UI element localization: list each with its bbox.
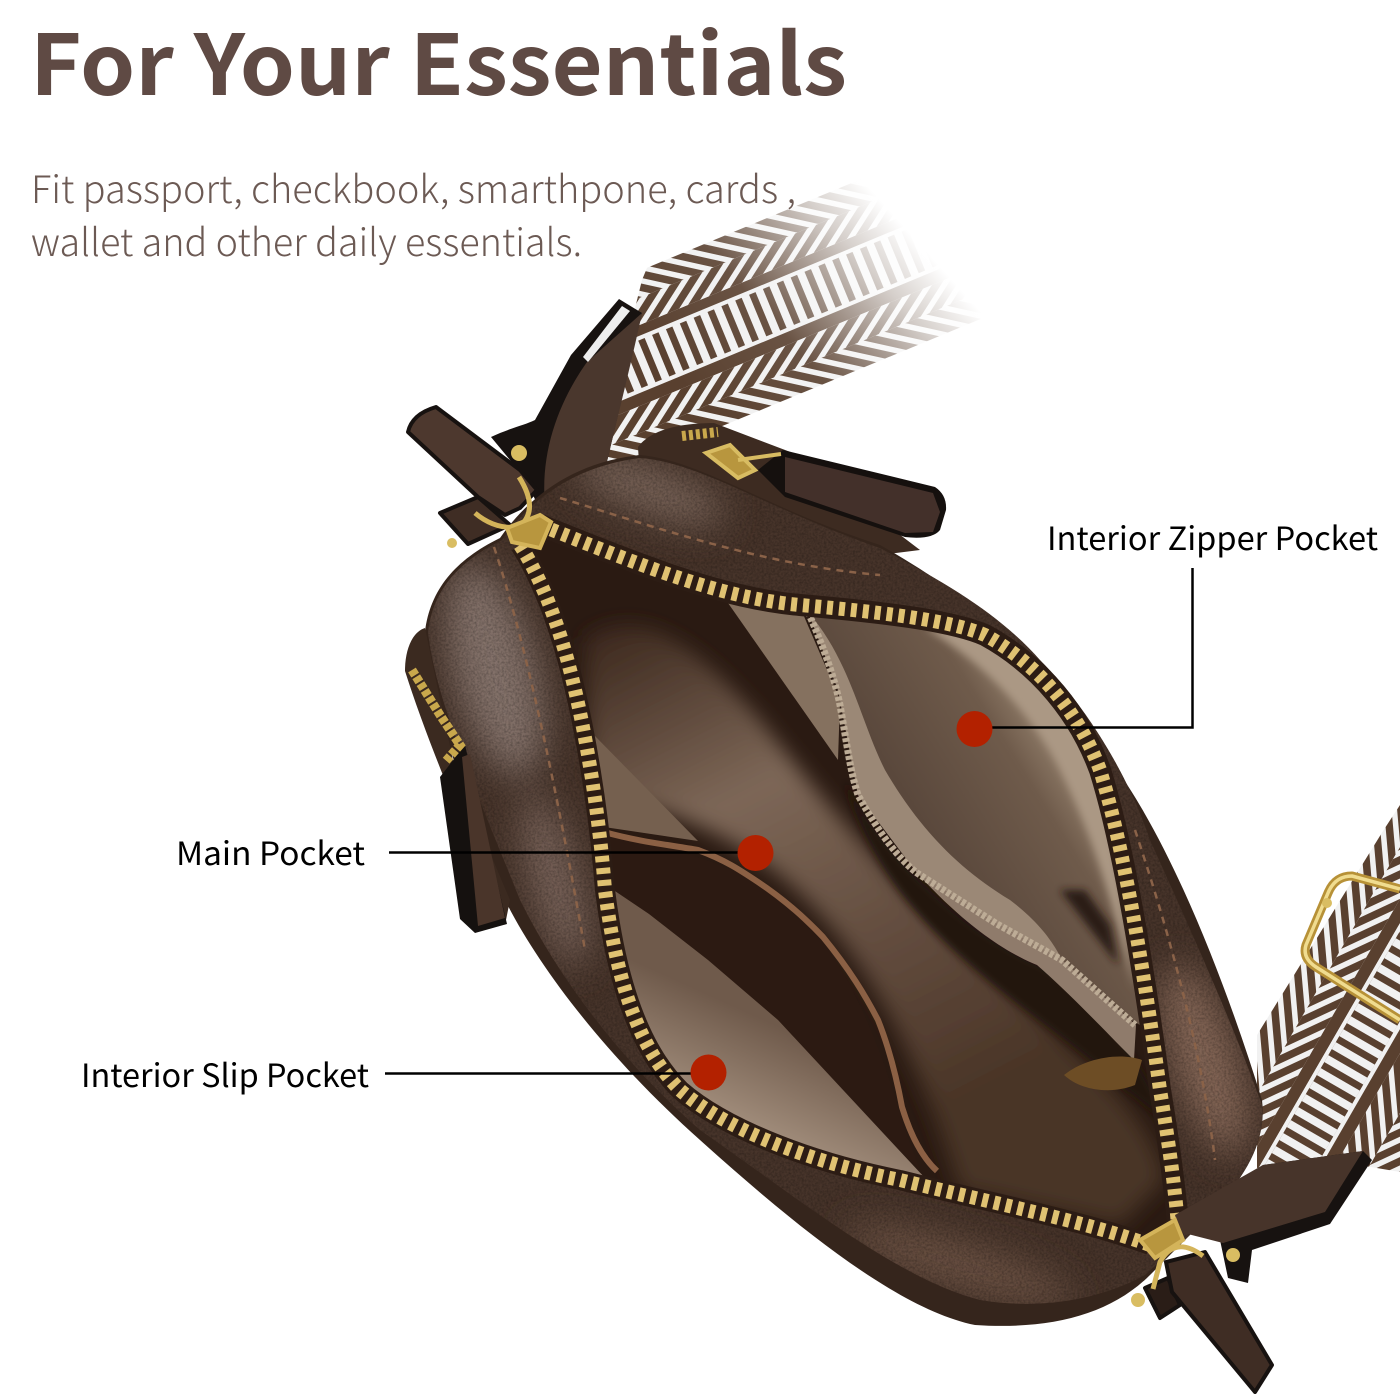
callout: main pocket [176, 829, 774, 875]
slip pocket fabric [605, 887, 925, 1180]
zipper pocket lower lip [917, 873, 1136, 1060]
callout: main pocket: Main Pocket [176, 829, 365, 875]
strap tab: left leather loop [408, 407, 537, 548]
zipper slider: top corner [475, 477, 551, 548]
subtitle: wallet and other daily essentials. [31, 212, 582, 267]
icon: gold strap buckle [1305, 876, 1400, 1020]
bag: back outer leather edge [425, 455, 1263, 1326]
zipper: main opening, lower edge [520, 545, 1150, 1245]
zipper puller: top front pocket [638, 423, 946, 570]
bag: interior opening [534, 540, 1167, 1234]
inner side fold [594, 735, 698, 841]
callout: interior zipper pocket [956, 514, 1378, 747]
zipper: main opening, upper edge [540, 525, 1178, 1225]
dark band beneath zipper pocket [852, 802, 1152, 1110]
strap tab: bottom leather loop [1131, 1252, 1272, 1392]
subtitle: Fit passport, checkbook, smarthpone, cards , [31, 159, 796, 214]
zipper puller: left front pocket [405, 628, 510, 933]
bag: front leather panels with highlights [420, 440, 1270, 1330]
zipper pocket flap [808, 612, 1062, 960]
bag: stitching seams [494, 498, 1215, 1160]
zipper pocket inner shadow [1060, 890, 1118, 965]
strap tab: top leather holder [491, 299, 642, 510]
zipper pocket interior satin [808, 606, 1140, 1025]
subtitle [31, 159, 796, 267]
strap tab: right leather holder [1175, 1151, 1372, 1283]
title: For Your Essentials [30, 0, 847, 120]
callout: interior slip pocket: Interior Slip Pocket [81, 1051, 369, 1097]
pale centre gusset [728, 603, 840, 760]
zipper slider: bottom corner [1140, 1220, 1203, 1289]
hanging zip pull [1064, 1056, 1142, 1090]
main pocket back panel [585, 626, 1165, 1225]
zipper pocket coil [808, 612, 1135, 1025]
callout: interior zipper pocket: Interior Zipper Pocket [1047, 514, 1378, 560]
satin pale strip [925, 628, 1134, 990]
interior dark base [534, 540, 1167, 1234]
strap: lower right woven strap [1257, 805, 1400, 1172]
slip pocket brown piping [604, 832, 937, 1171]
strap: upper woven strap fading out [608, 184, 976, 461]
slip pocket dark recess [602, 835, 920, 1170]
callout: interior slip pocket [81, 1051, 726, 1097]
